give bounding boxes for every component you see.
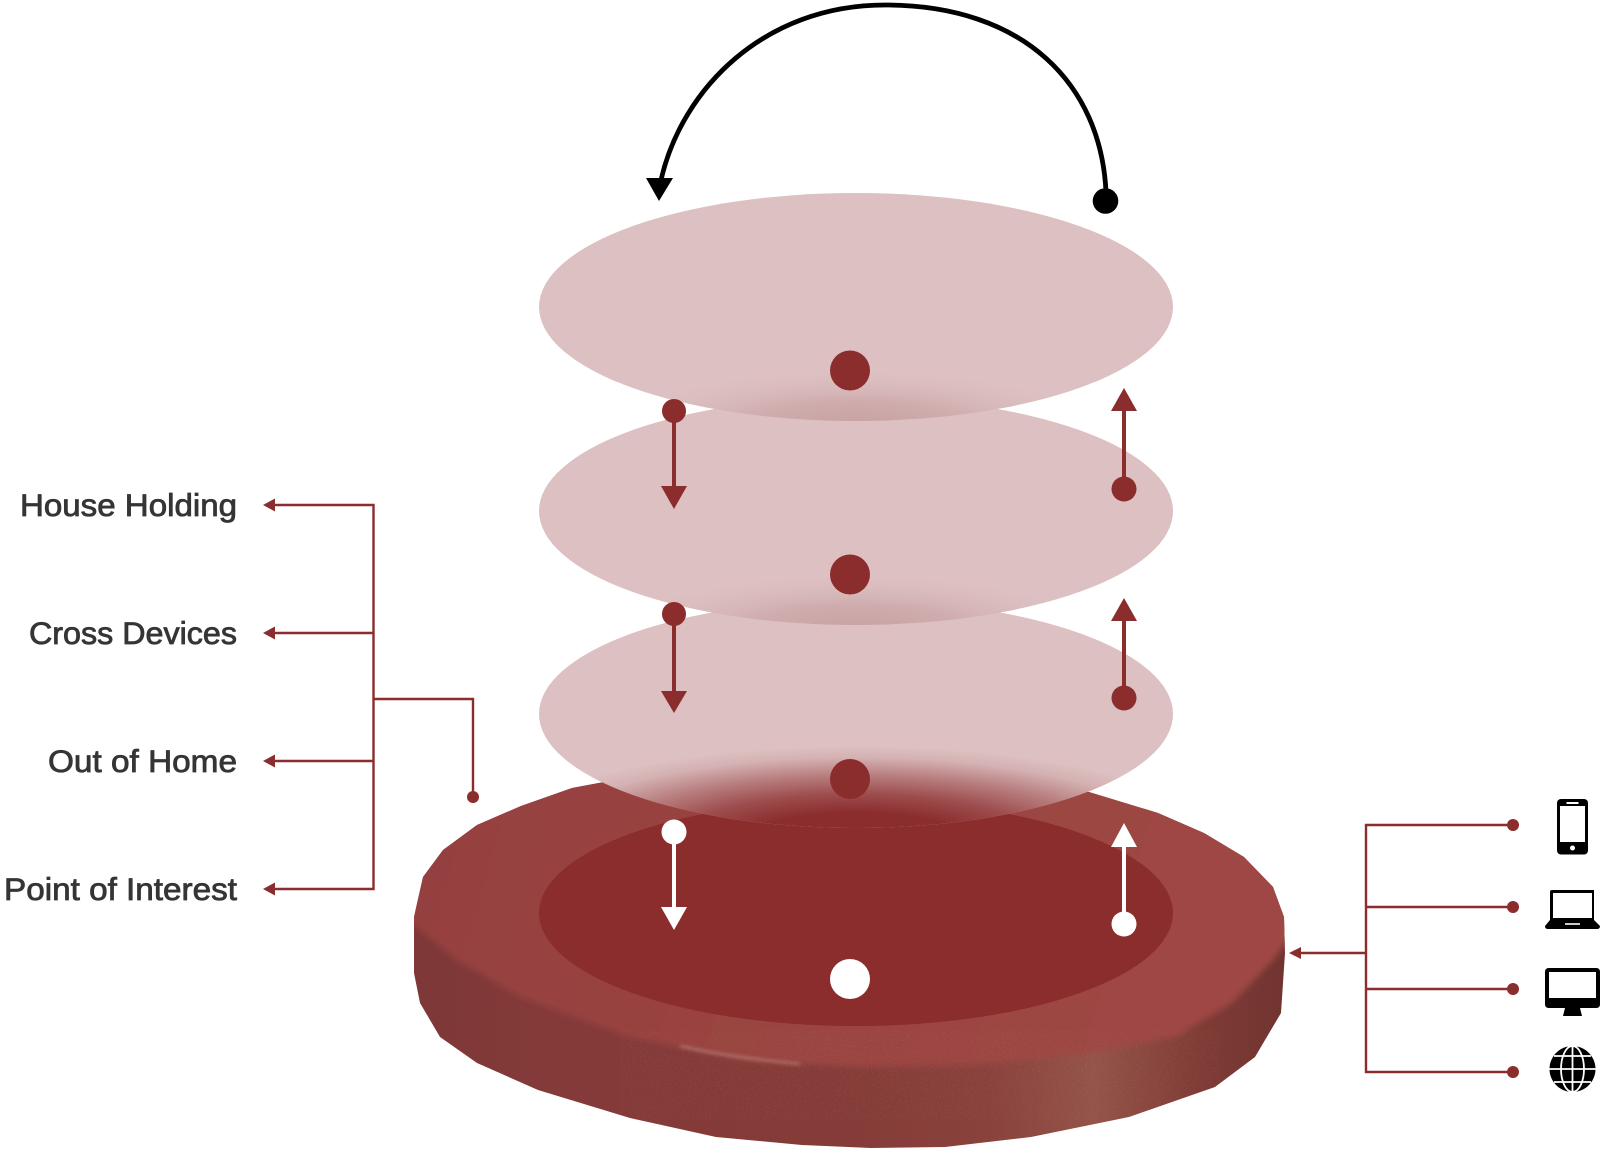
layer 1 shadow: [539, 193, 1173, 421]
disc top face and rim: [414, 782, 1285, 1118]
layer 2 plate: [539, 397, 1173, 625]
label: Point of Interest: Point of Interest: [4, 871, 237, 907]
icon: laptop: [1545, 890, 1600, 929]
icon: monitor: [1545, 968, 1600, 1016]
disc inner ellipse: [539, 800, 1173, 1026]
arrow: base down: [661, 820, 687, 930]
centre dots: [830, 350, 870, 999]
arrow: layer 2 up: [1111, 388, 1137, 502]
icon: globe: [1550, 1046, 1596, 1092]
circular black arrow: [646, 5, 1118, 214]
label: Out of Home: Out of Home: [48, 743, 237, 779]
label: House Holding: House Holding: [20, 487, 237, 523]
layer 1 plate: [539, 193, 1173, 421]
layer 1: [539, 193, 1173, 421]
right bracket connector: [1289, 819, 1519, 1078]
icon: phone: [1557, 799, 1588, 854]
left bracket connector: [263, 498, 479, 896]
arrow: base up: [1111, 823, 1137, 936]
layer 3 plate: [539, 600, 1173, 828]
arrow: layer 3 up: [1111, 598, 1137, 710]
layer 2: [539, 397, 1173, 625]
arrow: layer 2 down: [661, 602, 687, 713]
base disc: [414, 782, 1285, 1148]
arrow: layer 1 down: [661, 399, 687, 509]
disc side wall: [414, 765, 1285, 1148]
label: Cross Devices: Cross Devices: [29, 615, 237, 651]
layer 3: [539, 600, 1173, 828]
layer 3 fade: [539, 600, 1173, 828]
layer 2 shadow: [539, 397, 1173, 625]
